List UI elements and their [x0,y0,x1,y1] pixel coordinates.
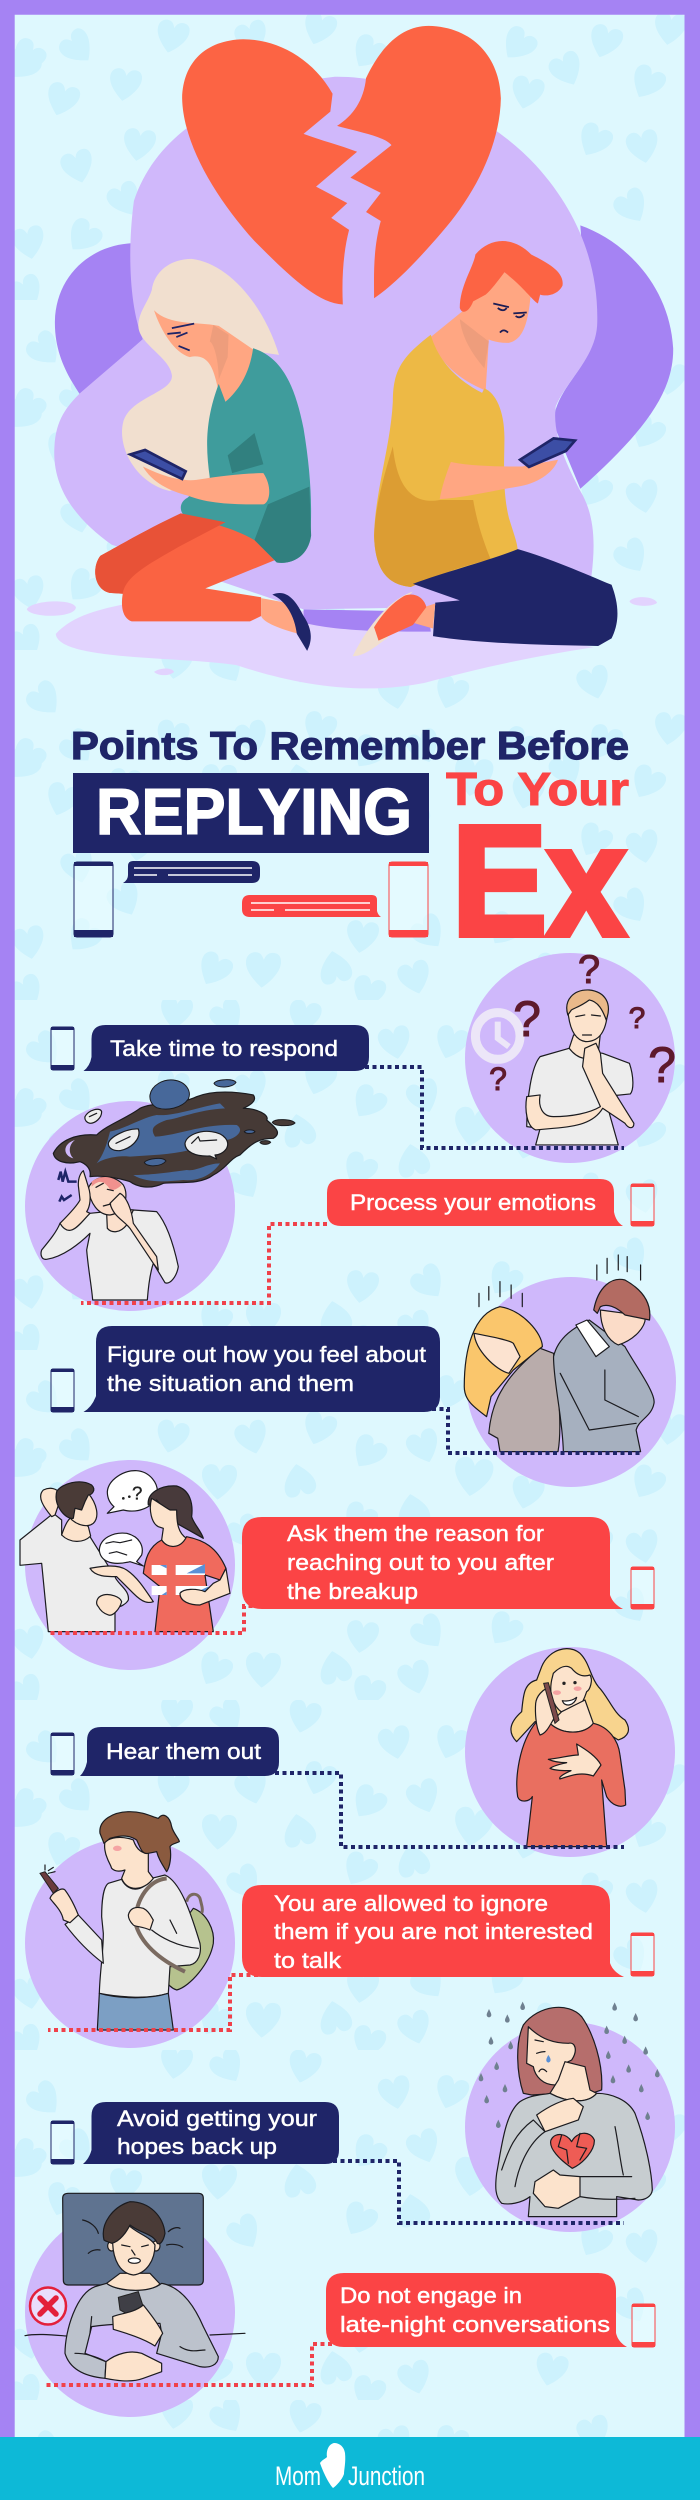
step 1: take time to respond: Take time to respond [110,1036,338,1061]
illustration 6: woman with backpack checking phone [40,1812,214,2030]
step 5: hear them out [51,1727,279,1776]
step 3: figure out how you feel: the situation and them [107,1371,354,1396]
dotted connectors [46,1067,641,2385]
illustration 4: couple talking: ? [132,1482,142,1503]
illustration 7: sad woman with broken heart [479,2002,660,2217]
floor shape [56,600,594,688]
hero illustration: broken heart and couple on phones [27,26,673,688]
step 5: hear them out: Hear them out [106,1739,262,1764]
step 4: ask them the reason: Ask them the reason for [287,1521,545,1546]
step 2: process your emotions [327,1179,654,1226]
step 6: allowed to ignore: to talk [274,1948,342,1973]
step 6: allowed to ignore: them if you are not interested [274,1919,593,1944]
circles [25,953,676,2417]
icon: chat between two phones [74,861,428,937]
title line one: Points To Remember Before [71,725,629,768]
illustration 3: upset couple back to back [464,1255,654,1452]
step 8: late-night conversations: late-night conversations [340,2312,610,2337]
dark purple blobs [55,225,673,632]
woman [95,259,311,651]
man [353,241,617,656]
question marks: ? [578,948,600,992]
illustration 5: smiling woman on the phone [511,1649,628,1847]
step 1: take time to respond [51,1025,369,1071]
icon: red cross mark [30,2288,66,2324]
light purple blob [54,77,597,609]
face and body [41,1210,178,1300]
step 6: allowed to ignore [242,1885,654,1977]
illustration 2: overwhelmed person with dark swirling thoughts [41,1080,295,1300]
step 8: late-night conversations [326,2273,655,2347]
banner: REPLYING: REPLYING [96,775,412,848]
footer [0,2437,700,2500]
step 4: ask them the reason: reaching out to you after [287,1550,555,1575]
step 4: ask them the reason: the breakup [287,1579,418,1604]
illustration 4: couple talking [20,1471,230,1632]
footer: Junction [348,2461,425,2491]
step 2: process your emotions: Process your emotions [350,1190,596,1215]
step 8: late-night conversations: Do not engage in [340,2283,522,2308]
title: Ex: Ex [452,794,626,969]
question marks [489,948,676,1097]
step 7: avoid getting your hopes back up: Avoid getting your [117,2106,318,2131]
step 3: figure out how you feel: Figure out how you feel about [107,1342,427,1367]
question marks: ? [489,1061,507,1097]
man [20,1513,128,1632]
question marks: ? [629,1002,645,1035]
step 3: figure out how you feel [51,1326,440,1412]
step 7: avoid getting your hopes back up [51,2102,339,2164]
dark thought cloud [53,1080,295,1187]
title [71,725,629,969]
puddles [27,597,657,675]
logo wordmark: Mom [275,2461,321,2491]
step 4: ask them the reason [242,1517,654,1609]
question marks: ? [648,1037,676,1093]
logo icon [320,2443,345,2488]
woman [148,1486,203,1538]
step 6: allowed to ignore: You are allowed to ignore [274,1891,548,1916]
illustration 1: thinking man with clock and question marks [475,948,676,1145]
broken heart [182,26,501,304]
step 7: avoid getting your hopes back up: hopes back up [117,2134,277,2159]
illustration 8: person in bed with phone [25,2193,245,2381]
question marks: ? [513,991,541,1047]
title: To Your: To Your [446,763,629,815]
clock [475,990,634,1145]
